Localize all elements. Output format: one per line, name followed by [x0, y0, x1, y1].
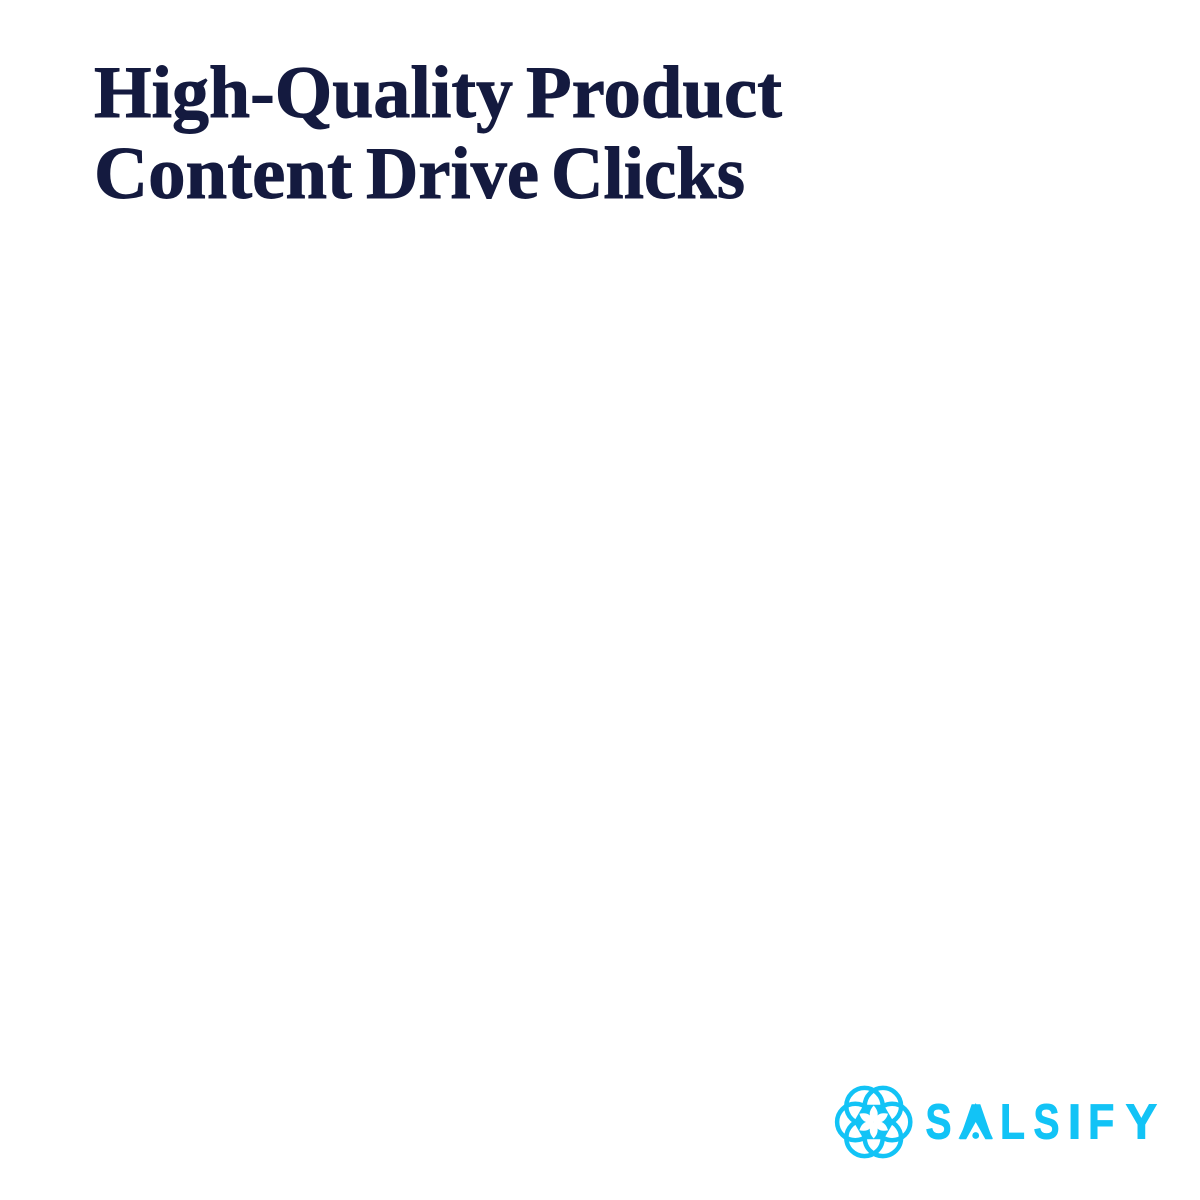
logo: Salsify [837, 1088, 1157, 1156]
title: Drive [366, 133, 539, 215]
title: High-Quality [94, 52, 513, 134]
title [94, 52, 782, 215]
logo letter A solid shape [958, 1103, 993, 1140]
logo wordmark: I [1068, 1096, 1081, 1150]
title: Product [526, 52, 782, 134]
logo wordmark: S [1034, 1096, 1060, 1150]
icon: flower rosette [837, 1088, 910, 1156]
logo wordmark: L [1000, 1096, 1025, 1150]
title: Content [94, 133, 352, 215]
logo wordmark [926, 1096, 1157, 1150]
logo wordmark: S [926, 1096, 952, 1150]
title: Clicks [551, 133, 745, 215]
logo wordmark: Y [1126, 1096, 1157, 1150]
logo wordmark: F [1088, 1096, 1114, 1150]
logo wordmark: A [959, 1096, 993, 1150]
